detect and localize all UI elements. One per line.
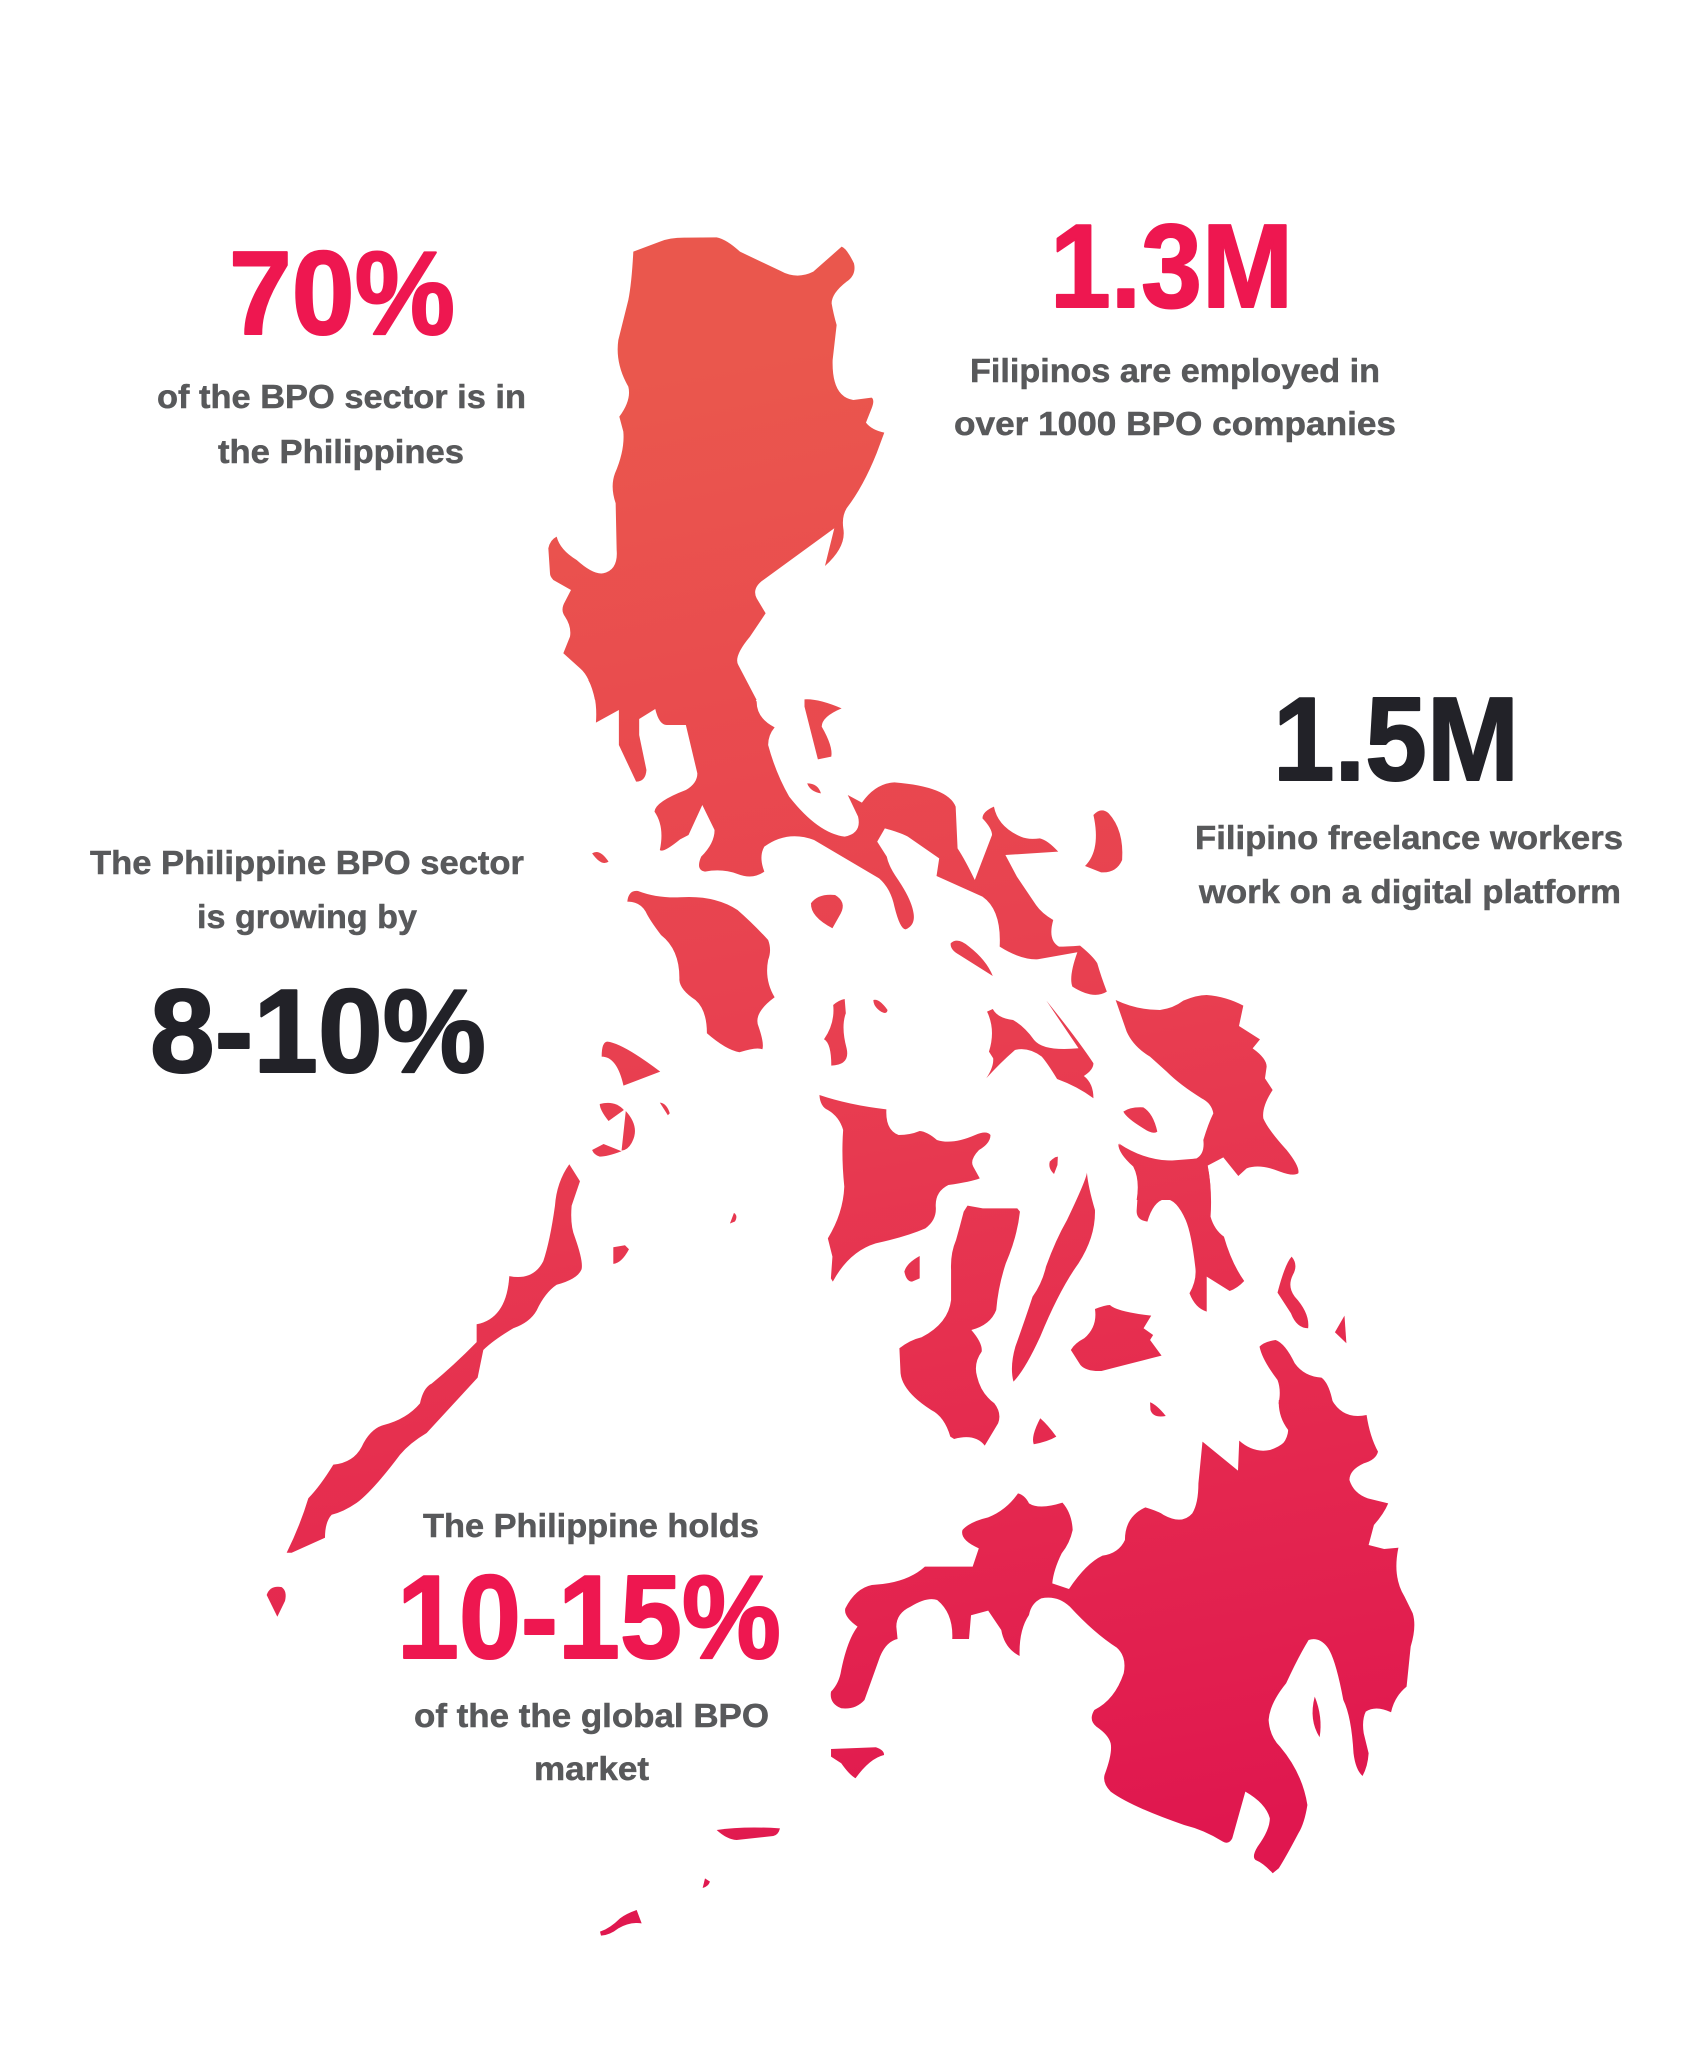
island: Sulu Sea islet (730, 1213, 736, 1224)
text: of the the global BPO market: market (534, 1750, 649, 1787)
island: Catanduanes (1085, 810, 1122, 872)
island: Culion lower (592, 1144, 622, 1157)
island group: Palawan (267, 1164, 736, 1617)
island: Negros (899, 1206, 1020, 1446)
number: 1.5M: 1.5M (1273, 673, 1519, 806)
island: Mindoro (627, 891, 775, 1052)
island: Samal (1313, 1697, 1321, 1737)
text: The Philippine BPO sector is growing by (90, 844, 524, 935)
island: Marinduque (811, 895, 843, 928)
island: Burias (951, 941, 993, 976)
island: southern Luzon (588, 680, 1107, 995)
island: Culion right (622, 1111, 635, 1151)
island: Biliran (1123, 1107, 1157, 1133)
island: northern tip of Mindanao (1260, 1340, 1376, 1455)
island: northern Luzon (548, 237, 884, 700)
text: Filipino freelance workers work on a digital platform: work on a digital platform (1198, 873, 1621, 910)
island: Tablas (824, 999, 847, 1066)
island: Palawan (287, 1164, 582, 1553)
island group: Visayas (819, 1095, 1376, 1455)
island group: Sulu (703, 1827, 780, 1888)
island: Cuyo islet (660, 1103, 670, 1115)
island: Balabac (267, 1587, 286, 1617)
island: Siquijor (1033, 1418, 1056, 1444)
island: small islet (807, 783, 821, 793)
text: Filipinos are employed in over 1000 BPO companies: over 1000 BPO companies (954, 405, 1396, 442)
island: Siargao (1335, 1316, 1346, 1343)
text: of the BPO sector is in the Philippines: of the BPO sector is in (157, 378, 526, 415)
number: 8-10%: 8-10% (150, 965, 486, 1098)
island: Masbate (986, 1001, 1093, 1098)
text: of the the global BPO market: of the the global BPO (414, 1697, 769, 1734)
island: Bantayan (1049, 1157, 1058, 1174)
text: of the BPO sector is in the Philippines (157, 378, 526, 470)
island: Basilan (831, 1747, 884, 1778)
text: The Philippine holds: The Philippine holds (423, 1507, 759, 1544)
number: 10-15%: 10-15% (397, 1551, 781, 1684)
island group: southern Luzon and Bicol (588, 680, 1122, 1157)
island: Camiguin (1150, 1402, 1166, 1416)
stat: 10-15% of the global BPO market (397, 1507, 781, 1787)
island: Cagayancillo (613, 1245, 629, 1264)
stat: 1.5M freelance workers (1195, 673, 1623, 910)
island group: Mindanao (831, 1400, 1414, 1873)
text: The Philippine BPO sector is growing by: The Philippine BPO sector (90, 844, 524, 881)
island: Romblon (873, 1000, 888, 1013)
text: Filipinos are employed in over 1000 BPO companies: Filipinos are employed in (970, 352, 1380, 389)
island: Leyte (1119, 1143, 1244, 1312)
island: Busuanga (602, 1042, 660, 1086)
island: Jolo (717, 1827, 780, 1840)
text: The Philippine BPO sector is growing by: is growing by (197, 898, 418, 935)
island: Guimaras (904, 1256, 920, 1282)
stat: sector growth 8-10% (90, 844, 524, 1098)
island: Panay (819, 1095, 990, 1282)
stat: 1.3M Filipinos employed (954, 200, 1396, 442)
stat: 70% of the BPO sector (157, 227, 526, 470)
text: of the the global BPO market (414, 1697, 769, 1787)
island: Bohol (1071, 1305, 1162, 1371)
map of the Philippines (267, 237, 1414, 1936)
island: Lubang (592, 852, 609, 863)
island: Tapul (703, 1878, 710, 1888)
text: Filipinos are employed in over 1000 BPO companies (954, 352, 1396, 442)
island: Samar (1116, 995, 1298, 1200)
island: Mindanao (831, 1400, 1414, 1873)
island: Polillo (804, 699, 842, 759)
number: 70%: 70% (229, 227, 455, 360)
island: Cebu (1012, 1173, 1095, 1382)
text: Filipino freelance workers work on a digital platform: Filipino freelance workers (1195, 819, 1623, 856)
island: Dinagat (1278, 1257, 1308, 1328)
number: 1.3M: 1.3M (1050, 200, 1293, 333)
text: Filipino freelance workers work on a digital platform (1195, 819, 1623, 910)
island: Culion upper (600, 1103, 624, 1121)
text: of the BPO sector is in the Philippines: the Philippines (218, 433, 464, 470)
island: Tawi-Tawi (600, 1910, 642, 1936)
